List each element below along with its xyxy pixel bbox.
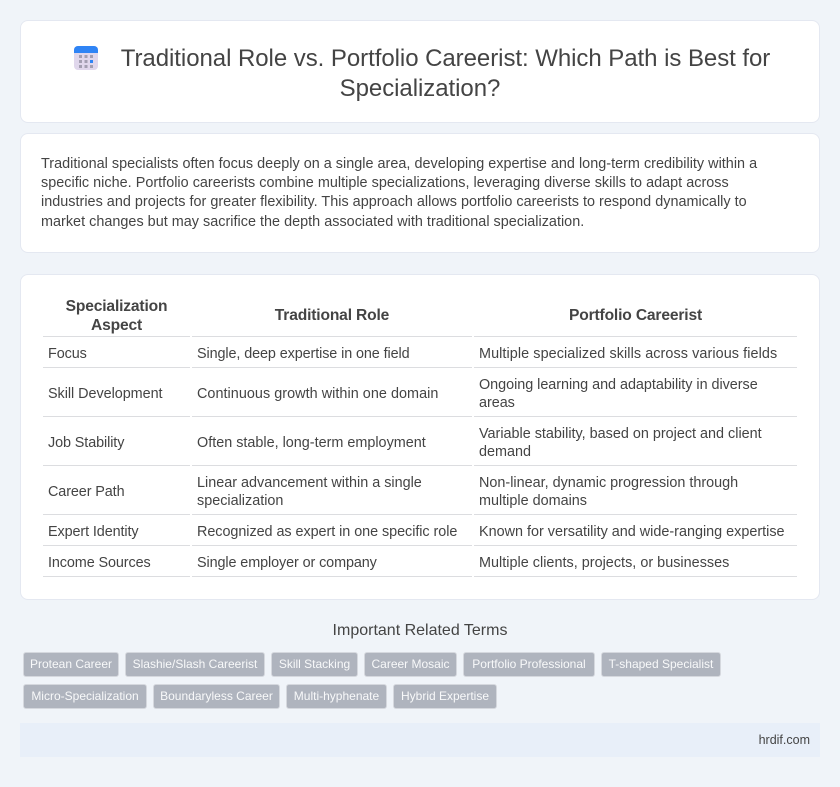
row: Expert Identity: Recognized as expert in one specific role — [197, 524, 457, 540]
footer source: hrdif.com — [759, 733, 810, 747]
tag — [125, 652, 265, 677]
tag: Micro-Specialization — [31, 689, 139, 703]
header: Traditional Role: Traditional Role — [275, 307, 389, 324]
tag — [23, 684, 147, 709]
intro text: Traditional specialists often focus deeply on a single area, developing expertise and long-term credibility within a — [41, 156, 757, 172]
row: Expert Identity: Known for versatility and wide-ranging expertise — [479, 524, 785, 540]
row: Career Path: specialization — [197, 493, 283, 509]
intro panel — [20, 133, 820, 253]
row: Income Sources — [48, 555, 729, 571]
tag — [463, 652, 595, 677]
row: Skill Development: Skill Development — [48, 386, 162, 402]
row: Focus — [48, 346, 777, 362]
row: Career Path: multiple domains — [479, 493, 587, 509]
tag: T-shaped Specialist — [609, 657, 713, 671]
row: Skill Development: areas — [479, 395, 515, 411]
row: Job Stability: Variable stability, based on project and client — [479, 426, 762, 442]
row: Focus: Single, deep expertise in one field — [197, 346, 410, 362]
tag: Portfolio Professional — [472, 657, 586, 671]
table — [43, 298, 797, 577]
row: Focus: Focus — [48, 346, 87, 362]
row: Career Path — [48, 475, 738, 509]
row: Income Sources: Income Sources — [48, 555, 151, 571]
row: Job Stability — [48, 426, 762, 460]
row: Career Path: Non-linear, dynamic progression through — [479, 475, 738, 491]
tag: Hybrid Expertise — [401, 689, 489, 703]
row: Income Sources: Multiple clients, projects, or businesses — [479, 555, 729, 571]
tag: Skill Stacking — [279, 657, 350, 671]
row: Skill Development: Continuous growth within one domain — [197, 386, 438, 402]
related terms heading: Important Related Terms — [333, 622, 507, 639]
row: Career Path: Career Path — [48, 484, 124, 500]
tag: Boundaryless Career — [160, 689, 273, 703]
related term tags — [23, 652, 721, 709]
row: Skill Development — [48, 377, 758, 411]
header panel — [20, 20, 820, 123]
row: Expert Identity — [48, 524, 785, 540]
intro text: industries and projects for greater flexibility. This approach allows portfolio careerists to respond dynamically to — [41, 194, 747, 210]
title — [121, 45, 770, 102]
header: Specialization Aspect — [66, 298, 167, 334]
row: Job Stability: demand — [479, 444, 531, 460]
row: Job Stability: Job Stability — [48, 435, 124, 451]
footer band — [20, 723, 820, 757]
header: Portfolio Careerist: Portfolio Careerist — [569, 307, 702, 324]
tag: Protean Career — [30, 657, 112, 671]
icon: calendar — [74, 46, 98, 70]
intro text: market changes but may sacrifice the depth associated with traditional specialization. — [41, 214, 584, 230]
tag: Slashie/Slash Careerist — [133, 657, 257, 671]
row: Skill Development: Ongoing learning and adaptability in diverse — [479, 377, 758, 393]
header: Specialization Aspect: Aspect — [91, 317, 142, 334]
header: Specialization Aspect: Specialization — [66, 298, 167, 315]
tag — [271, 652, 358, 677]
title: Specialization? — [340, 75, 500, 102]
tag — [364, 652, 457, 677]
row: Job Stability: Often stable, long-term employment — [197, 435, 426, 451]
comparison table panel — [20, 274, 820, 600]
row: Income Sources: Single employer or company — [197, 555, 377, 571]
tag: Career Mosaic — [371, 657, 450, 671]
intro text — [41, 156, 758, 230]
title: Traditional Role vs. Portfolio Careerist: Which Path is Best for — [121, 45, 770, 72]
row: Focus: Multiple specialized skills across various fields — [479, 346, 777, 362]
tag: Multi-hyphenate — [294, 689, 379, 703]
intro text: specific niche. Portfolio careerists combine multiple specializations, leveraging diverse skills to adapt across — [41, 175, 729, 191]
row: Expert Identity: Expert Identity — [48, 524, 138, 540]
tag — [601, 652, 721, 677]
tag — [393, 684, 497, 709]
row: Career Path: Linear advancement within a single — [197, 475, 422, 491]
tag — [286, 684, 387, 709]
tag — [23, 652, 119, 677]
tag — [153, 684, 280, 709]
